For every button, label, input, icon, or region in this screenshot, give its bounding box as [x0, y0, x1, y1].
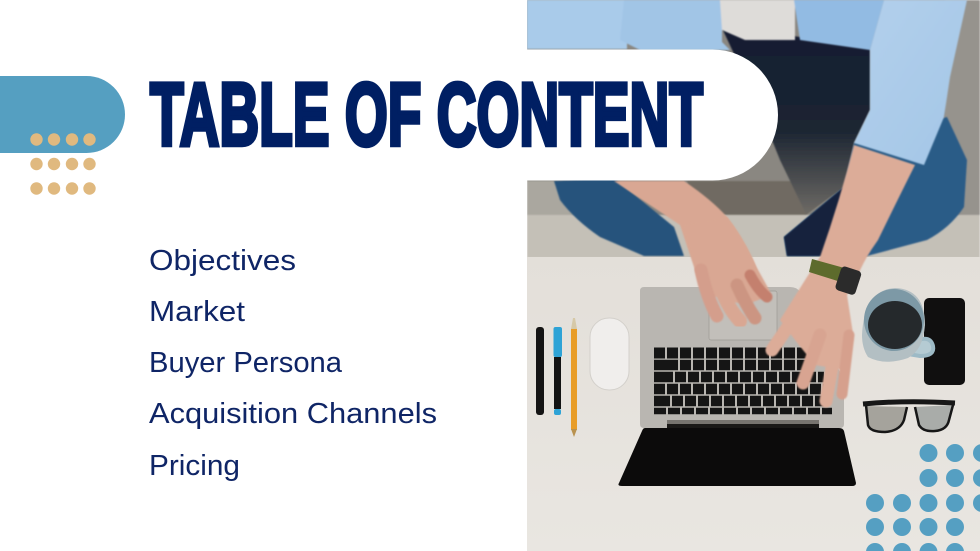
sofa background	[527, 0, 980, 258]
computer mouse	[590, 318, 629, 390]
hinge	[667, 420, 819, 424]
laptop	[618, 287, 856, 486]
list item: Buyer Persona: Buyer Persona	[149, 347, 343, 379]
left knee jeans	[554, 178, 684, 256]
smartwatch	[809, 259, 862, 296]
dark jeans	[722, 28, 870, 214]
keyboard	[654, 353, 832, 411]
orange pencil	[571, 318, 577, 437]
left hand on trackpad	[682, 217, 772, 321]
white title pill	[400, 50, 778, 180]
laptop screen	[618, 428, 856, 486]
trackpad	[709, 291, 777, 340]
coffee mug	[862, 288, 933, 362]
blue accent pill	[0, 76, 125, 153]
table top	[527, 257, 980, 551]
left forearm	[614, 180, 752, 270]
tan dot grid	[30, 133, 96, 195]
blue dot grid	[866, 444, 980, 551]
blue pen	[554, 327, 562, 415]
laptop base	[640, 287, 844, 428]
list item: Market: Market	[149, 296, 245, 328]
photo: person typing on a laptop at a desk	[527, 0, 980, 551]
list item: Acquisition Channels: Acquisition Channels	[149, 398, 437, 430]
list item: Pricing: Pricing	[149, 450, 240, 482]
right knee jeans	[784, 117, 967, 256]
right arm and hand	[772, 145, 915, 401]
phone	[924, 298, 965, 385]
contents list	[149, 245, 437, 482]
black pen	[536, 327, 544, 415]
eyeglasses	[863, 402, 955, 432]
list item: Objectives: Objectives	[149, 245, 296, 277]
shirt	[527, 0, 967, 165]
